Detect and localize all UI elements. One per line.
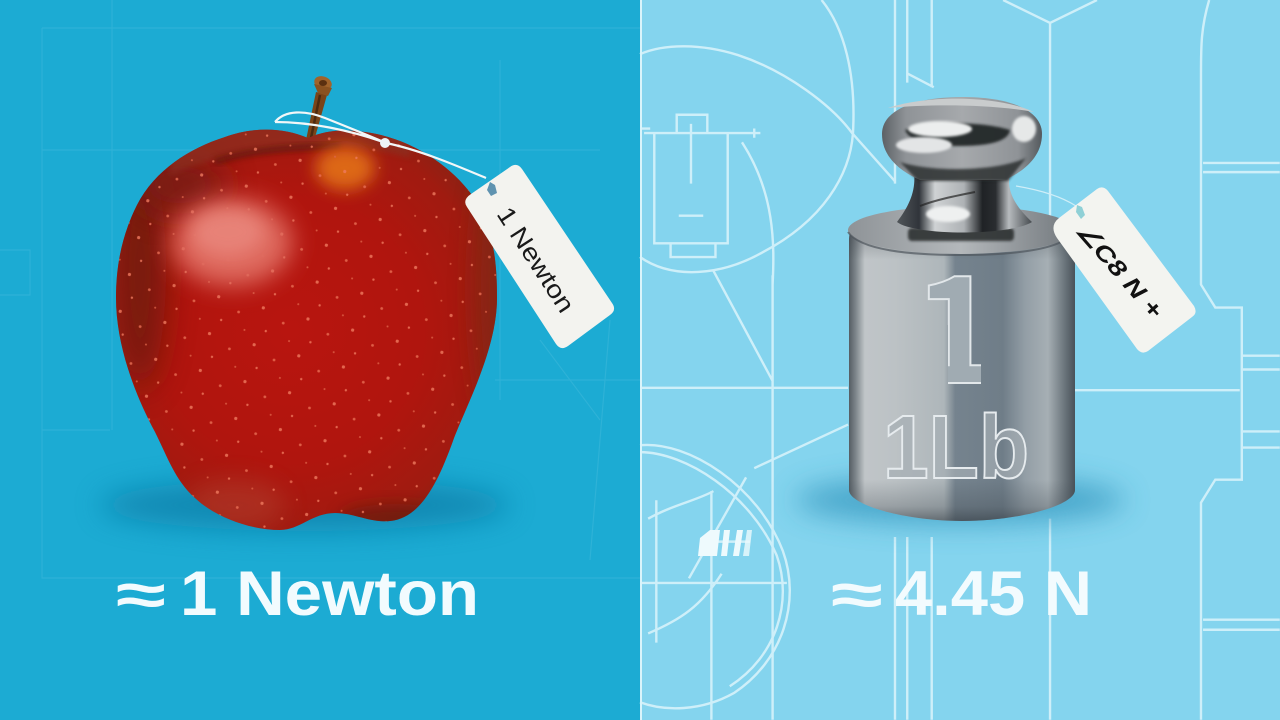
- faint blueprint grid behind apple: [0, 0, 640, 578]
- tag: 1 Newton: [465, 165, 614, 348]
- apple body: [116, 130, 497, 530]
- blueprint small filled mark: [698, 530, 752, 556]
- label: approx 4.45 N: 4.45 N: [895, 559, 1092, 629]
- weight knob: [882, 97, 1042, 181]
- label: approx 1 Newton: 1 Newton: [180, 559, 479, 629]
- tag: 1 Newton: 1 Newton: [491, 202, 580, 318]
- tag: weight handwritten label: ∠C8 N +: [1071, 217, 1168, 323]
- weight body: [848, 206, 1075, 521]
- metal weight: [848, 97, 1075, 521]
- panel: left apple side: [0, 0, 640, 616]
- weight neck: [897, 172, 1032, 232]
- apple string: [275, 112, 486, 178]
- shadow under apple: [100, 479, 510, 531]
- panel: right weight side: [640, 0, 1280, 720]
- apple stem: [306, 74, 334, 141]
- engraved numeral 1: 1: [913, 211, 1000, 426]
- engraved 1Lb: 1Lb: [883, 398, 1029, 498]
- blueprint line drawing: [640, 0, 1280, 720]
- shadow under weight: [795, 476, 1125, 524]
- panel edge: [640, 0, 642, 720]
- apple illustration: [116, 76, 497, 530]
- weight string: [1016, 186, 1076, 206]
- tag: weight handwritten label: [1053, 187, 1196, 353]
- label: approx 1 Newton: ≈: [116, 561, 166, 628]
- string knot: [380, 138, 390, 148]
- label: approx 4.45 N: ≈: [831, 561, 883, 628]
